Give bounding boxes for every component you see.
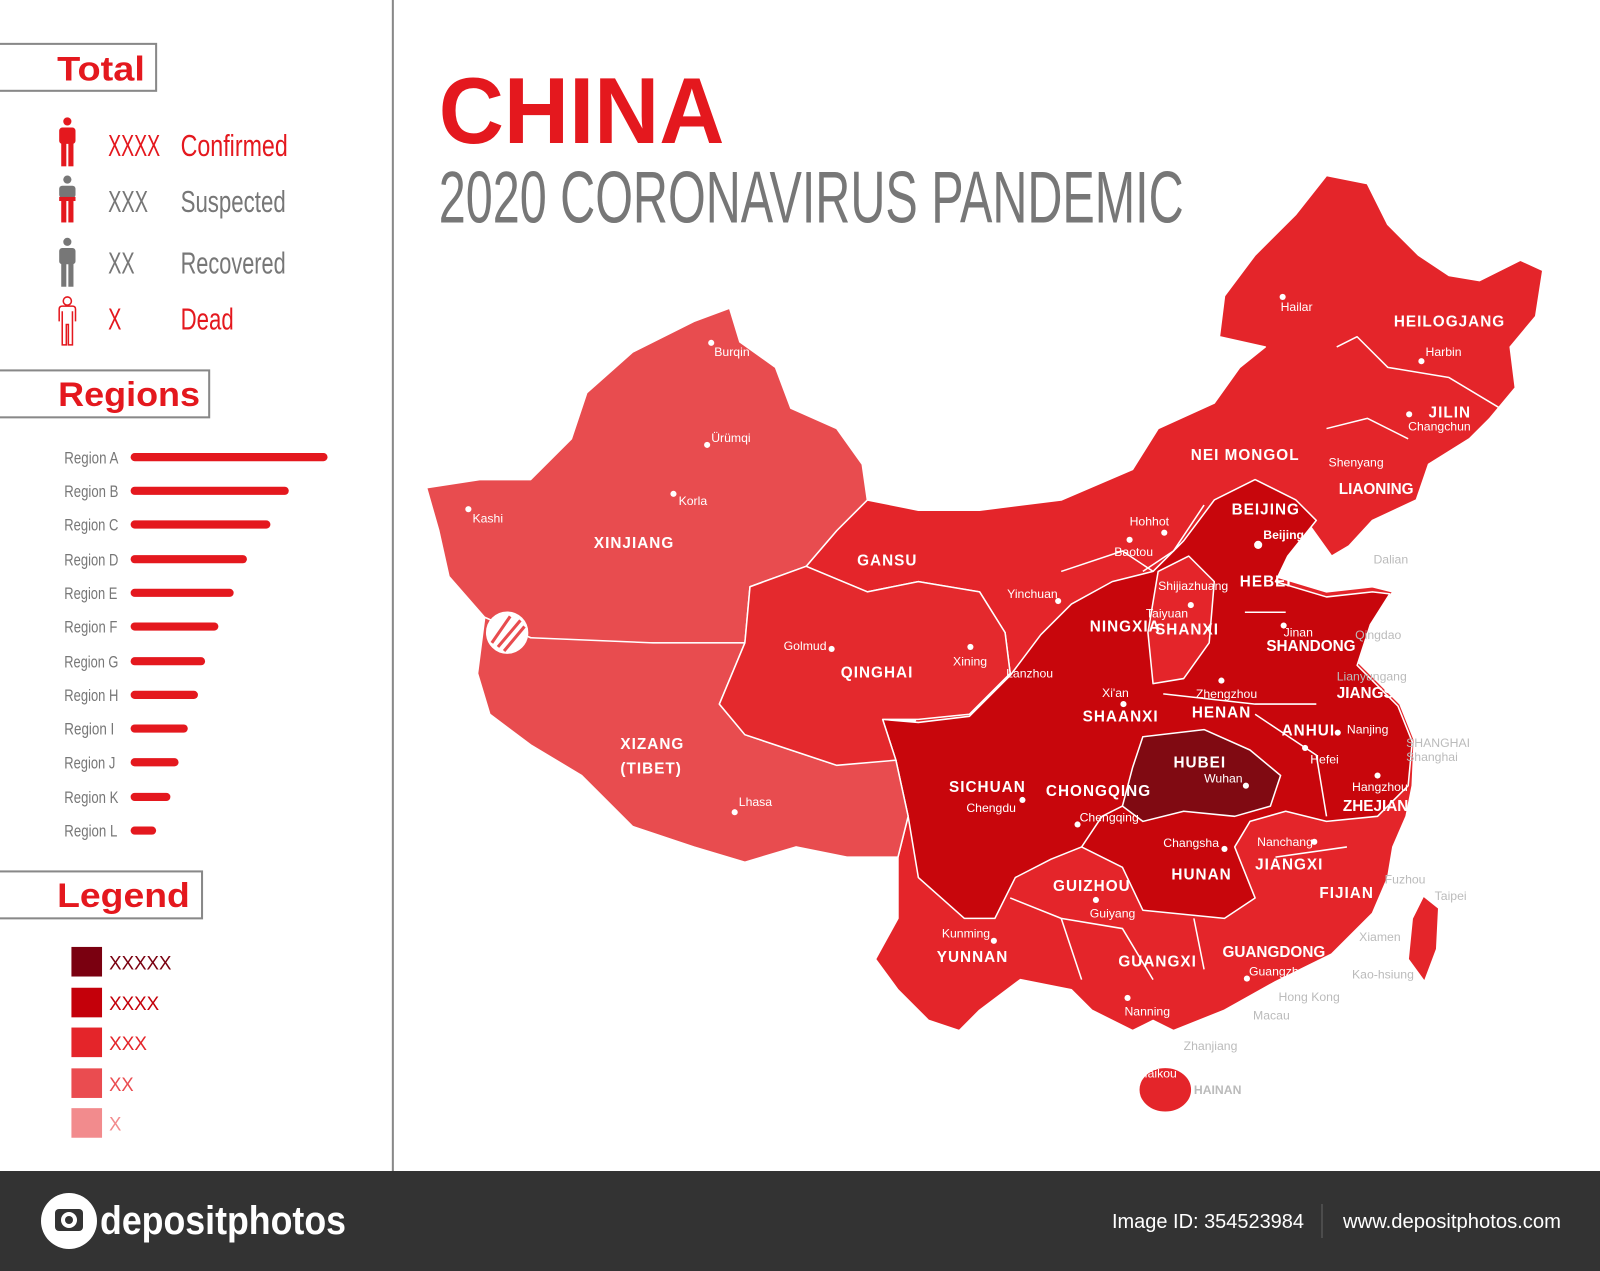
map labels: cities: Korla	[679, 494, 707, 508]
map labels: cities: Xining	[953, 654, 987, 668]
map labels: provinces: SHANDONG	[1266, 638, 1356, 655]
bar chart: regions: Region A	[64, 449, 118, 467]
map labels: provinces: JILIN	[1429, 404, 1471, 421]
text: dead	[108, 303, 234, 337]
footer logo	[41, 1193, 346, 1249]
map labels: outside grey: Macau	[1253, 1008, 1290, 1022]
icon: confirmed person	[59, 117, 76, 166]
map labels: outside grey: Qingdao	[1355, 628, 1402, 642]
map labels: cities: Burqin	[714, 345, 750, 359]
text: dead: Dead	[181, 303, 234, 337]
map labels: provinces	[594, 314, 1505, 970]
map labels: provinces: ANHUI	[1282, 723, 1335, 740]
bar chart: regions: Region D	[64, 551, 118, 569]
map labels: cities: Zhengzhou	[1196, 687, 1257, 701]
map labels: outside grey: Lianyungang	[1337, 670, 1407, 684]
map labels: provinces: GUIZHOU	[1053, 878, 1131, 895]
legend swatches: XX	[109, 1074, 134, 1096]
heading: legend	[0, 871, 202, 918]
heading: legend: Legend	[57, 877, 190, 915]
map labels: provinces: NINGXIA	[1090, 619, 1161, 636]
text: dead: X	[108, 303, 121, 337]
heading: regions	[0, 370, 209, 417]
footer image id	[1112, 1204, 1561, 1238]
icon: recovered person	[59, 238, 76, 287]
bar chart: regions: Region G	[64, 653, 118, 671]
map labels: provinces: XINJIANG	[594, 535, 674, 552]
map labels: provinces: GANSU	[857, 552, 917, 569]
map labels: cities: Nanning	[1124, 1004, 1170, 1018]
map labels: provinces: ZHEJIANG	[1343, 798, 1420, 815]
map labels: provinces: JIANGSU	[1337, 685, 1405, 702]
map labels: outside grey: HAINAN	[1194, 1083, 1242, 1097]
map labels: provinces: (TIBET)	[620, 760, 682, 777]
map labels: cities: Lanzhou	[1006, 667, 1053, 681]
panel: legend	[0, 871, 202, 1138]
map labels: provinces: LIAONING	[1339, 481, 1414, 498]
map labels: provinces: JIANGXI	[1255, 856, 1323, 873]
map labels: cities: Hailar	[1281, 300, 1313, 314]
legend swatches: X	[109, 1114, 121, 1136]
map labels: cities: Nanjing	[1347, 723, 1389, 737]
map labels: outside grey	[1184, 552, 1470, 1097]
map labels: provinces: HENAN	[1192, 704, 1251, 721]
text: suspected: Suspected	[181, 185, 286, 219]
map labels: cities: Shijiazhuang	[1158, 579, 1228, 593]
legend swatches: XXXXX	[109, 952, 171, 974]
region: xizang	[478, 617, 908, 862]
region: darker central provinces	[883, 480, 1412, 918]
map labels: cities: Lhasa	[739, 795, 772, 809]
region: hubei	[1122, 730, 1281, 821]
map labels: cities: Guiyang	[1090, 906, 1136, 920]
text: suspected: XXX	[108, 185, 148, 219]
bar chart: regions: Region C	[64, 517, 119, 535]
map labels: provinces: BEIJING	[1232, 501, 1300, 518]
map labels: outside grey: Kao-hsiung	[1352, 968, 1414, 982]
region: xinjiang	[427, 308, 867, 643]
icon: suspected person	[59, 176, 76, 222]
map labels: outside grey: SHANGHAI	[1406, 736, 1470, 750]
map labels: provinces: HEBEI	[1240, 574, 1292, 591]
region: base red north/east/south	[806, 176, 1543, 1031]
map labels: provinces: SICHUAN	[949, 779, 1026, 796]
map labels: outside grey: Taipei	[1435, 889, 1467, 903]
bar chart: regions: Region B	[64, 483, 118, 501]
map labels: outside grey: Dalian	[1373, 552, 1408, 566]
icon: dead person	[59, 297, 76, 345]
bar chart: regions	[64, 449, 328, 841]
internal borders	[1010, 337, 1500, 980]
map labels: cities: Changsha	[1163, 836, 1219, 850]
bar chart: regions: Region H	[64, 687, 118, 705]
island: hainan	[1139, 1067, 1192, 1112]
map labels: cities: Kunming	[942, 927, 990, 941]
map labels: outside grey: Fuzhou	[1385, 873, 1425, 887]
text: recovered: XX	[108, 246, 135, 280]
heading: regions: Regions	[58, 376, 200, 414]
map labels: cities: Shenyang	[1329, 455, 1384, 469]
legend swatches: XXX	[109, 1033, 147, 1055]
text: confirmed: Confirmed	[181, 129, 288, 163]
region: shanxi lighter	[1148, 556, 1214, 684]
bar chart: regions: Region L	[64, 823, 117, 841]
heading: total	[0, 44, 156, 91]
panel: total	[0, 44, 288, 345]
island: taiwan	[1408, 896, 1439, 982]
bar chart: regions: Region I	[64, 721, 114, 739]
text: confirmed	[108, 129, 288, 163]
map labels: cities: Beijing	[1263, 528, 1304, 542]
map labels: cities: Xi'an	[1102, 686, 1129, 700]
map labels: cities: Hangzhou	[1352, 780, 1408, 794]
footer logo: depositphotos	[100, 1199, 346, 1243]
map labels: cities: Harbin	[1425, 345, 1462, 359]
text: suspected	[108, 185, 286, 219]
map labels: cities: Nanchang	[1257, 835, 1313, 849]
map labels: provinces: SHANXI	[1155, 622, 1219, 639]
footer bar	[0, 1171, 1600, 1271]
legend swatches	[71, 947, 171, 1138]
map labels: provinces: HEILOGJANG	[1394, 314, 1505, 331]
footer image id: www.depositphotos.com	[1342, 1211, 1561, 1233]
bar chart: regions: Region F	[64, 619, 117, 637]
text: recovered	[108, 246, 286, 280]
divider line	[392, 0, 394, 1171]
map labels: provinces: HUBEI	[1173, 754, 1226, 771]
map labels: cities: Hohhot	[1130, 515, 1170, 529]
map labels: cities: Baotou	[1114, 545, 1153, 559]
bar chart: regions: Region E	[64, 585, 117, 603]
map labels: outside grey: Zhanjiang	[1184, 1039, 1238, 1053]
map labels: provinces: FIJIAN	[1319, 885, 1374, 902]
map labels: cities: Kashi	[472, 511, 503, 525]
bar chart: regions: Region K	[64, 789, 118, 807]
map labels: cities	[472, 300, 1471, 1081]
bar chart: regions: Region J	[64, 754, 115, 772]
city dots	[465, 294, 1424, 1001]
map labels: provinces: NEI MONGOL	[1191, 447, 1300, 464]
map labels: provinces: QINGHAI	[841, 665, 913, 682]
map labels: cities: Chengqing	[1080, 810, 1139, 824]
map labels: cities: Golmud	[784, 639, 827, 653]
panel: regions	[0, 370, 328, 841]
map labels: provinces: YUNNAN	[937, 949, 1008, 966]
hatched area	[487, 612, 528, 653]
map labels: cities: Jinan	[1284, 626, 1313, 640]
map labels: cities: Ürümqi	[711, 431, 751, 445]
map: china	[427, 176, 1543, 1112]
legend swatches: XXXX	[109, 993, 159, 1015]
map labels: outside grey: Hong Kong	[1279, 990, 1340, 1004]
title	[439, 58, 1184, 238]
text: recovered: Recovered	[181, 246, 286, 280]
map labels: cities: Chengdu	[966, 801, 1016, 815]
map labels: cities: Guangzhou	[1249, 965, 1312, 979]
map labels: outside grey: Shanghai	[1406, 750, 1458, 764]
map labels: provinces: XIZANG	[620, 736, 684, 753]
text: confirmed: XXXX	[108, 129, 160, 163]
map labels: provinces: HUNAN	[1171, 867, 1232, 884]
map labels: cities: Haikou	[1139, 1067, 1177, 1081]
title: CHINA	[439, 58, 724, 163]
map labels: outside grey: Xiamen	[1359, 930, 1401, 944]
map labels: cities: Changchun	[1408, 420, 1471, 434]
map labels: cities: Wuhan	[1204, 772, 1243, 786]
region: qinghai	[719, 566, 1010, 765]
map labels: provinces: GUANGDONG	[1222, 944, 1325, 961]
map labels: cities: Yinchuan	[1007, 587, 1058, 601]
map labels: provinces: CHONGQING	[1046, 783, 1151, 800]
map labels: provinces: SHAANXI	[1083, 708, 1159, 725]
subtitle: 2020 CORONAVIRUS PANDEMIC	[439, 155, 1184, 238]
map labels: provinces: GUANGXI	[1118, 953, 1197, 970]
heading: total: Total	[57, 51, 145, 89]
footer image id: Image ID: 354523984	[1112, 1211, 1304, 1233]
map labels: cities: Taiyuan	[1146, 606, 1188, 620]
map labels: cities: Hefei	[1310, 752, 1339, 766]
